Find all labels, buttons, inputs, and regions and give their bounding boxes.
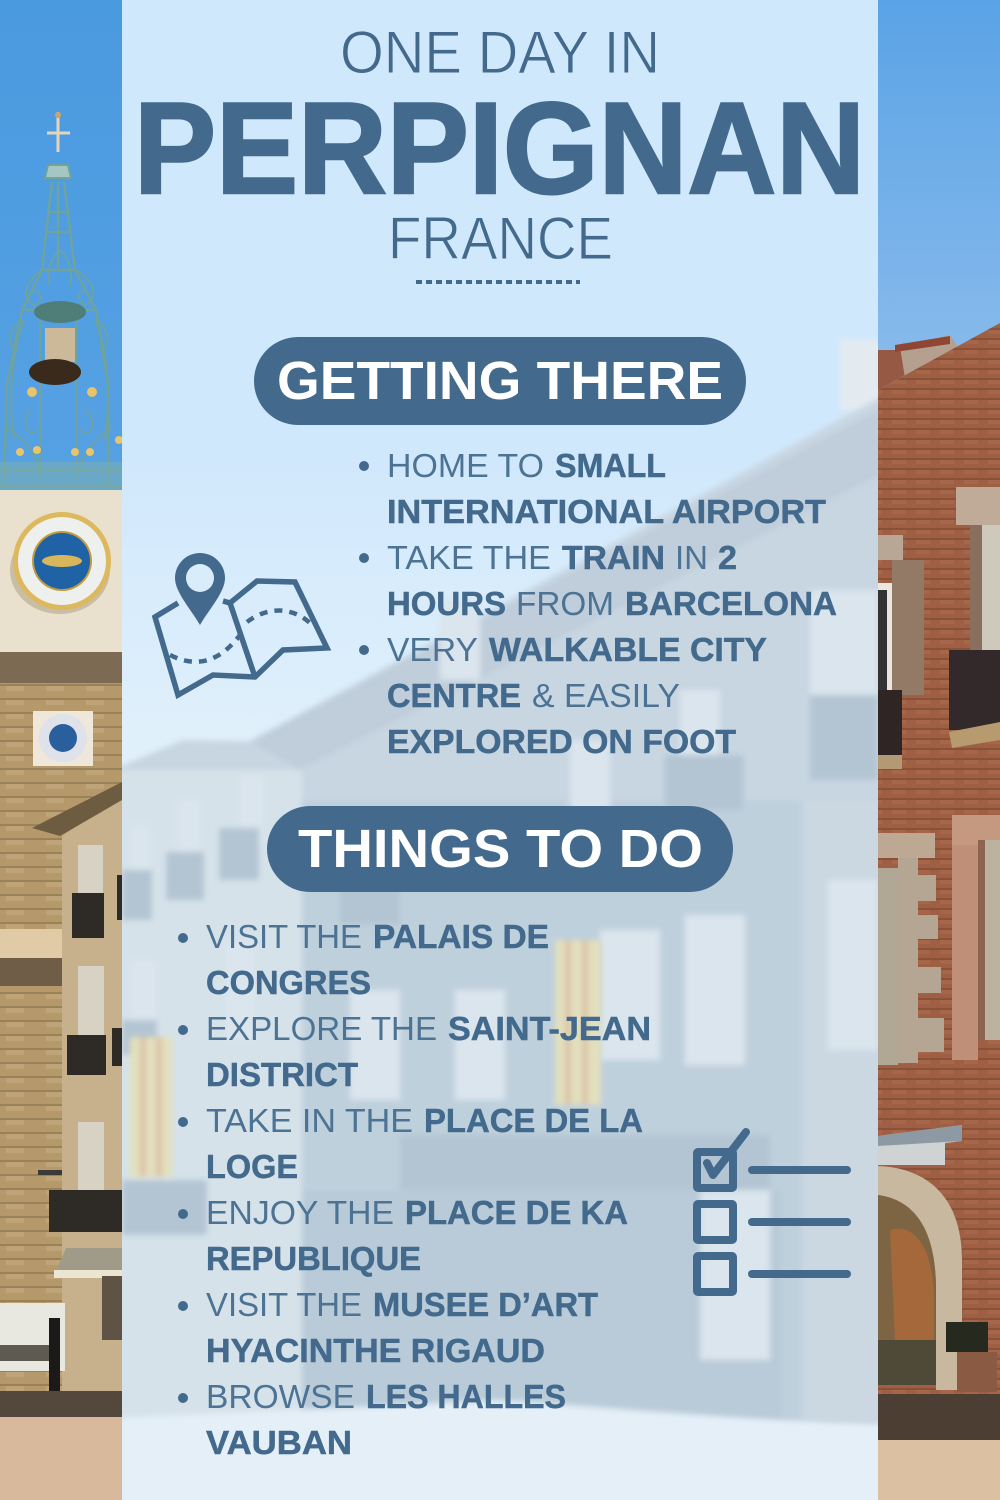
list: things to do: PLACE DE KA [405,1194,628,1231]
list: things to do: REPUBLIQUE [206,1240,421,1277]
list: getting there: IN [675,539,708,576]
heading: getting there [254,337,746,425]
list: things to do: BROWSE [206,1378,355,1415]
faded balconies [122,695,878,1235]
heading: things to do: THINGS TO DO [298,819,703,879]
background: right photo strip with brick building [878,0,1000,1500]
banner flags [130,940,601,1177]
icon: checklist [697,1132,847,1292]
pink stone window frame [952,815,1000,1060]
list: getting there: 2 [718,539,737,576]
small clock [33,711,93,766]
list: things to do: DISTRICT [206,1056,358,1093]
heading: getting there: GETTING THERE [277,351,723,411]
list: getting there: & EASILY [532,677,680,714]
list: things to do: LES HALLES [366,1378,566,1415]
translucent centre panel with faded photo [100,0,890,1500]
ground right [878,1394,1000,1440]
list: getting there: SMALL [555,447,666,484]
tower stone [0,683,122,1393]
list: things to do: VISIT THE [206,918,362,955]
left building [0,782,122,1394]
list: getting there: WALKABLE CITY [489,631,767,668]
list: things to do: VAUBAN [206,1424,352,1461]
list: things to do: EXPLORE THE [206,1010,437,1047]
list: things to do: ENJOY THE [206,1194,394,1231]
background: left photo strip with tower [0,0,123,1500]
list: getting there: TAKE THE [387,539,551,576]
list: things to do: TAKE IN THE [206,1102,413,1139]
title: ONE DAY IN [340,19,660,86]
list: things to do: CONGRES [206,964,371,1001]
faded windows [348,590,878,1362]
list: getting there: HOURS [387,585,506,622]
title: PERPIGNAN [134,75,865,221]
list: getting there: INTERNATIONAL AIRPORT [387,493,826,530]
list: things to do: SAINT-JEAN [448,1010,651,1047]
list: getting there: FROM [516,585,614,622]
list: getting there: HOME TO [387,447,544,484]
list: things to do: MUSEE D’ART [373,1286,598,1323]
ground left [0,1391,122,1417]
list: things to do: VISIT THE [206,1286,362,1323]
list: things to do: HYACINTHE RIGAUD [206,1332,545,1369]
spire [0,112,123,490]
list: things to do [178,918,651,1461]
title: FRANCE [388,205,613,272]
list: things to do: LOGE [206,1148,298,1185]
list: getting there: EXPLORED ON FOOT [387,723,736,760]
icon: map with location pin [155,553,327,695]
heading: things to do [267,806,733,892]
list: getting there [359,447,837,760]
list: getting there: VERY [387,631,478,668]
window and balcony, upper left [878,535,924,769]
clock face [10,512,111,614]
list: getting there: TRAIN [562,539,665,576]
list: things to do: PLACE DE LA [424,1102,643,1139]
window and balcony, upper right [949,487,1000,748]
plant pot [946,1322,997,1392]
list: getting there: BARCELONA [625,585,837,622]
title [134,19,865,282]
awning and arched doorway [878,1125,962,1390]
shuttered window with stone frame [878,833,944,1065]
list: getting there: CENTRE [387,677,521,714]
list: things to do: PALAIS DE [373,918,549,955]
